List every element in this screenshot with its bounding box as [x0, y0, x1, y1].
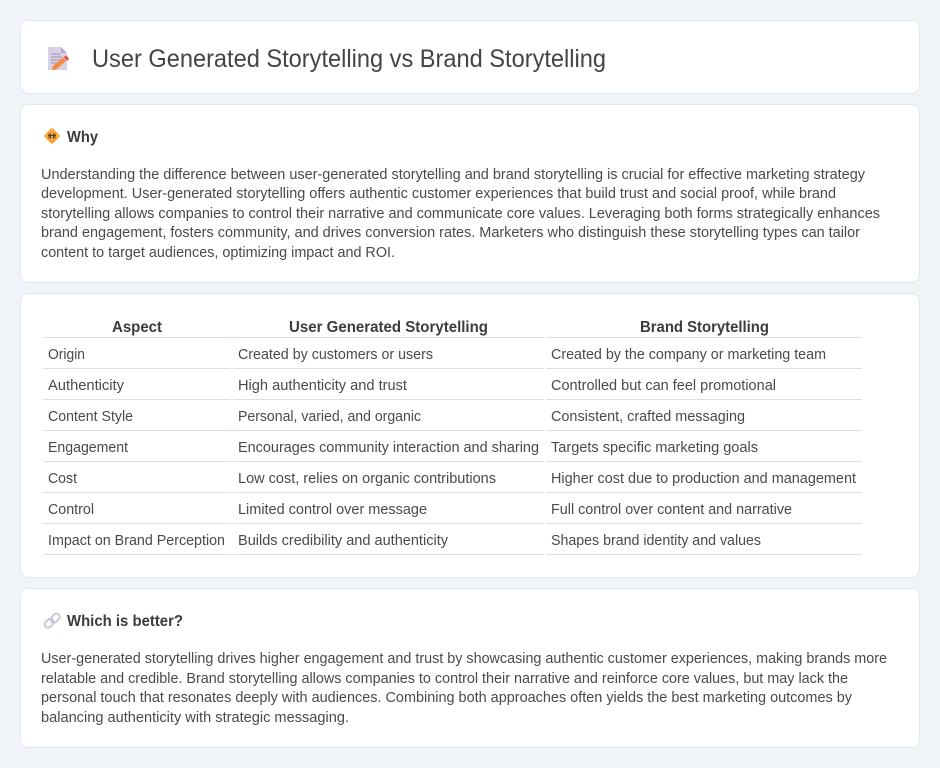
panel: which is better: [20, 588, 920, 748]
table row: cost: Cost: [48, 471, 77, 487]
table row: control: [43, 502, 862, 524]
text block: why paragraph: storytelling allows companies to control their narrative and communicate core values. Leveraging both forms strategically enhances: [41, 206, 880, 222]
text block: which is better paragraph: balancing authenticity with strategic messaging.: [41, 710, 349, 726]
table row: content style: Personal, varied, and organic: [238, 409, 421, 425]
text block: which is better paragraph: [41, 651, 887, 726]
table row: impact on brand perception: Impact on Brand Perception: [48, 533, 225, 549]
icon: memo with pencil: [48, 47, 69, 70]
table row: cost: Higher cost due to production and management: [551, 471, 856, 487]
table row: engagement: Targets specific marketing goals: [551, 440, 758, 456]
table header row: Brand Storytelling: [640, 319, 769, 336]
table header row: [43, 319, 862, 338]
text block: which is better paragraph: User-generated storytelling drives higher engagement and trust by showcasing authentic customer experiences, making brands more: [41, 651, 887, 667]
table row: authenticity: High authenticity and trust: [238, 378, 407, 394]
table row: control: Full control over content and narrative: [551, 502, 792, 518]
table row: origin: Origin: [48, 347, 85, 363]
icon: link: [43, 612, 61, 629]
table row: origin: Created by the company or marketing team: [551, 347, 826, 363]
text block: why paragraph: development. User-generated storytelling offers authentic customer experiences that build trust and social proof, while brand: [41, 186, 836, 202]
table row: engagement: [43, 440, 862, 462]
table row: authenticity: Controlled but can feel promotional: [551, 378, 776, 394]
table row: impact on brand perception: Shapes brand identity and values: [551, 533, 761, 549]
text block: which is better paragraph: relatable and credible. Brand storytelling allows companies to control their narrative and reinforce core values, but may lack the: [41, 671, 848, 687]
table row: control: Control: [48, 502, 94, 518]
table row: impact on brand perception: [43, 533, 862, 554]
table row: content style: Consistent, crafted messaging: [551, 409, 745, 425]
heading: which is better: Which is better?: [67, 613, 183, 630]
text block: why paragraph: Understanding the difference between user-generated storytelling and brand storytelling is crucial for effective marketing strategy: [41, 167, 866, 183]
table row: engagement: Engagement: [48, 440, 128, 456]
table row: content style: [43, 409, 862, 430]
table row: origin: [43, 347, 862, 368]
table row: impact on brand perception: Builds credibility and authenticity: [238, 533, 449, 549]
table row: authenticity: [43, 378, 862, 400]
table row: cost: Low cost, relies on organic contributions: [238, 471, 496, 487]
panel: header: [20, 20, 920, 94]
table header row: User Generated Storytelling: [289, 319, 488, 336]
text block: why paragraph: content to target audiences, optimizing impact and ROI.: [41, 245, 395, 261]
table row: control: Limited control over message: [238, 502, 427, 518]
panel: why: [20, 104, 920, 282]
title: User Generated Storytelling vs Brand Storytelling: [92, 45, 606, 73]
icon: children crossing diamond: [44, 128, 60, 144]
table header row: Aspect: [112, 319, 163, 336]
text block: why paragraph: brand engagement, fosters community, and drives conversion rates. Marketers who distinguish these storytelling types can tailor: [41, 225, 860, 241]
heading: why: Why: [67, 129, 98, 146]
panel: comparison table: [20, 294, 920, 578]
text block: why paragraph: [41, 167, 880, 261]
table row: origin: Created by customers or users: [238, 347, 433, 363]
table row: content style: Content Style: [48, 409, 133, 425]
table row: engagement: Encourages community interaction and sharing: [238, 440, 539, 456]
text block: which is better paragraph: personal touch that resonates deeply with audiences. Combining both approaches often yields the best marketing outcomes by: [41, 690, 853, 706]
table row: cost: [43, 471, 862, 492]
table row: authenticity: Authenticity: [48, 378, 125, 394]
